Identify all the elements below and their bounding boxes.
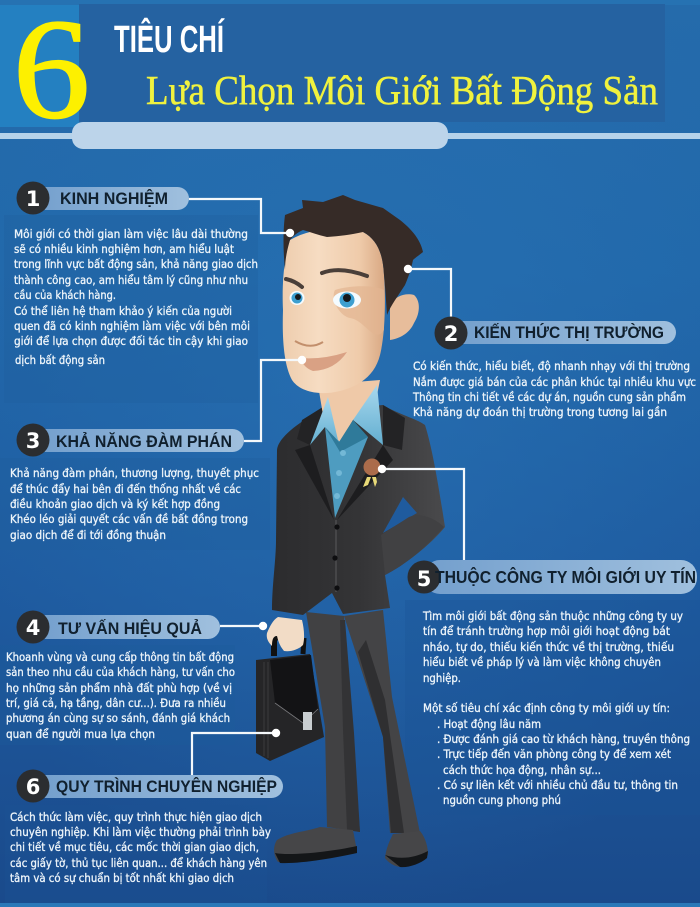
heading 6 [16, 770, 283, 802]
text block 5: . Trực tiếp đến văn phòng công ty để xem xét [437, 747, 671, 761]
heading 3: KHẢ NĂNG ĐÀM PHÁN [56, 432, 232, 451]
hair [284, 195, 423, 315]
text block 5 [422, 609, 690, 807]
text block 6: tâm và có sự chuẩn bị tốt nhất khi giao dịch [10, 871, 234, 885]
text block 5: tín để tránh trường hợp môi giới hoạt động bát [423, 624, 670, 638]
heading 5: 5 [417, 567, 431, 591]
heading 4 [16, 610, 220, 644]
heading 1 [16, 182, 189, 214]
text block 1: trong lĩnh vực bất động sản, khả năng giao dịch [14, 257, 258, 271]
heading 2 [434, 316, 676, 350]
text block 6: các giấy tờ, thủ tục liên quan... để khách hàng yên [10, 856, 267, 870]
header [0, 0, 700, 149]
connector 6 [192, 729, 280, 776]
text block 4: họ những sản phẩm nhà đất phù hợp (về vị [6, 681, 232, 695]
panel 3: khả năng đàm phán [10, 424, 259, 542]
text block 5: . Có sự liên kết với nhiều chủ đầu tư, thông tin [437, 778, 678, 792]
text block 5: hiểu biết về pháp lý và làm việc không chuyên [423, 655, 661, 669]
text block 3 [10, 466, 259, 542]
title line 2: Lựa Chọn Môi Giới Bất Động Sản [146, 67, 658, 113]
connector 4 [220, 622, 267, 630]
panel 4: tư vấn hiệu quả [6, 610, 235, 741]
jacket buttons [332, 524, 340, 591]
title line 1: TIÊU CHÍ [114, 17, 225, 61]
face [283, 229, 385, 393]
heading 6: QUY TRÌNH CHUYÊN NGHIỆP [56, 777, 277, 796]
heading 4: 4 [26, 616, 40, 640]
connector 5 [378, 465, 464, 562]
heading 3: 3 [26, 429, 40, 453]
text block 5: . Hoạt động lâu năm [437, 717, 541, 731]
heading 3 [16, 424, 244, 456]
text block 6: chuyên nghiệp. Khi làm việc thường phải trình bày [10, 825, 271, 839]
text block 3: giao dịch để đi tới đồng thuận [10, 528, 166, 542]
text block 3: Khả năng đàm phán, thương lượng, thuyết phục [10, 466, 259, 480]
ear [390, 294, 419, 340]
text block 6 [10, 810, 271, 885]
neck [318, 380, 380, 442]
briefcase [256, 636, 324, 761]
text block 4: quan để người mua lựa chọn [6, 727, 155, 741]
text panel tints [0, 215, 700, 903]
text block 1: quen đã có kinh nghiệm làm việc với bên môi [14, 319, 250, 333]
text block 1 [14, 227, 258, 367]
connectors [189, 199, 464, 776]
text block 4: Khoanh vùng và cung cấp thông tin bất động [6, 650, 234, 664]
text block 4 [6, 650, 235, 741]
connector 2 [404, 265, 451, 320]
text block 1: cầu của khách hàng. [14, 288, 116, 302]
text block 4: trí, giá cả, hạ tầng, dân cư...). Đưa ra nhiều [6, 696, 226, 710]
text block 3: để thúc đẩy hai bên đi đến thống nhất về các [10, 482, 241, 496]
text block 1: sẽ có nhiều kinh nghiệm hơn, am hiểu luật [14, 242, 234, 256]
eyes [290, 291, 361, 308]
jacket [272, 405, 445, 615]
text block 1: giới để lựa chọn được đối tác tin cậy khi giao [14, 334, 248, 348]
header background blocks [0, 0, 700, 127]
text block 1: dịch bất động sản [15, 353, 105, 367]
text block 6: Cách thức làm việc, quy trình thực hiện giao dịch [10, 810, 262, 824]
header rule and pill [0, 122, 700, 149]
nose [295, 341, 323, 346]
text block 5: cách thức họa động, nhân sự... [443, 763, 601, 777]
text block 5: nghiệp. [423, 671, 461, 685]
heading 4: TƯ VẤN HIỆU QUẢ [58, 619, 202, 638]
text block 1: thành công cao, am hiểu tâm lý cũng như nhu [14, 273, 248, 287]
heading 1: 1 [26, 187, 40, 211]
text block 4: sản theo nhu cầu của khách hàng, tư vấn cho [6, 665, 235, 679]
cheek shading [334, 286, 384, 335]
heading 1: KINH NGHIỆM [60, 189, 168, 208]
connector 1 [189, 199, 294, 237]
text block 1: Có thể liên hệ tham khảo ý kiến của người [14, 304, 232, 318]
heading 6: 6 [26, 775, 40, 799]
text block 2: Khả năng dự đoán thị trường trong tương lai gần [413, 405, 667, 419]
panel 6: quy trình chuyên nghiệp [10, 770, 283, 885]
text block 1: Môi giới có thời gian làm việc lâu dài thường [14, 227, 248, 241]
connector 3 [244, 356, 306, 441]
heading 2: 2 [444, 322, 458, 346]
trousers [306, 610, 420, 833]
panel 1: kinh nghiệm [14, 182, 258, 367]
text block 3: Khéo léo giải quyết các vấn đề bất đồng trong [10, 512, 248, 526]
heading 2: KIẾN THỨC THỊ TRƯỜNG [474, 323, 664, 342]
text block 6: chi tiết về mục tiêu, các mốc thời gian giao dịch, [10, 840, 259, 854]
rosette badge [363, 458, 380, 487]
text block 4: phương án cùng sự so sánh, đánh giá khách [6, 711, 230, 725]
text block 3: điều khoản giao dịch và ký kết hợp đồng [10, 497, 220, 511]
text block 2 [412, 359, 696, 419]
heading 5 [408, 560, 697, 594]
panel 5: thuộc công ty môi giới uy tín [408, 560, 697, 807]
panel 2: kiến thức thị trường [412, 316, 696, 419]
text block 5: nháo, tự do, thiếu kiến thức về thị trường, thiếu [423, 640, 674, 654]
text block 5: Một số tiêu chí xác định công ty môi giới uy tín: [423, 701, 670, 715]
mouth [300, 352, 347, 371]
shirt and collar [310, 380, 383, 518]
text block 5: nguồn cung phong phú [443, 793, 561, 807]
businessman illustration [256, 195, 445, 867]
eyebrows [286, 270, 367, 287]
shoes [274, 827, 428, 867]
left hand [267, 617, 304, 651]
